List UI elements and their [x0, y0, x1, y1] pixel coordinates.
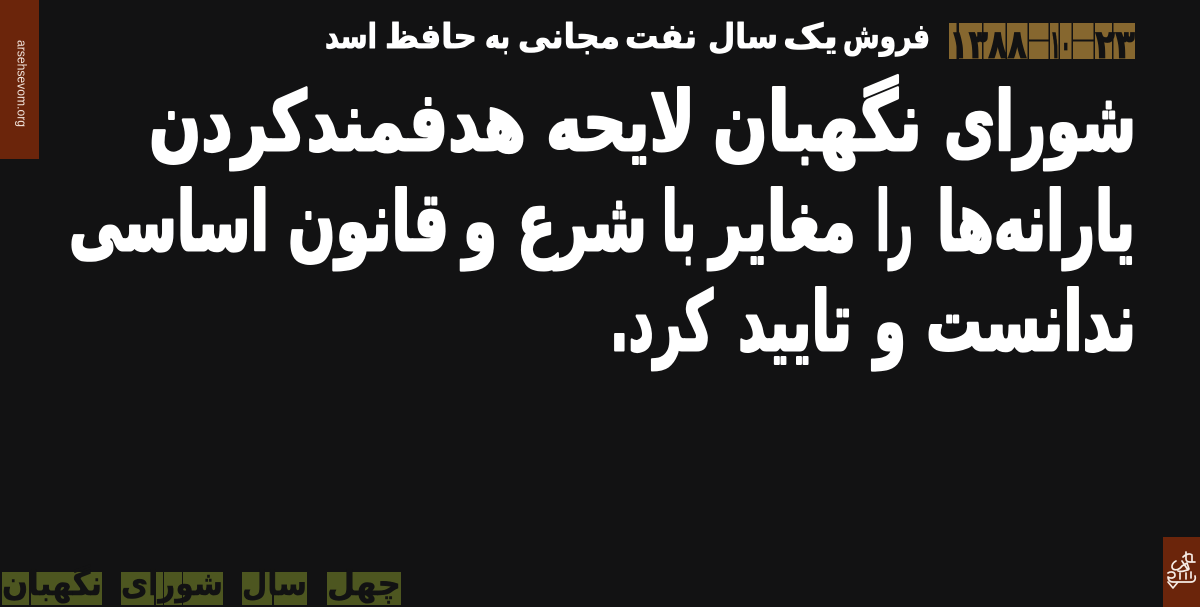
- headline line 2: شرع: [517, 175, 647, 270]
- footer stamp: چهل: [327, 564, 401, 604]
- date stamp: ۱۰: [1050, 22, 1071, 68]
- icon: calligraphic logo: [1168, 552, 1195, 588]
- date stamp: [949, 22, 1135, 68]
- headline: [69, 75, 1136, 371]
- subtitle: اسد: [325, 17, 377, 57]
- panel: logo tab: [1163, 537, 1200, 607]
- date stamp: ۱۳۸۸: [949, 22, 1027, 68]
- subtitle: سال: [708, 17, 778, 57]
- headline line 2: [69, 175, 1135, 271]
- subtitle: [325, 17, 930, 57]
- headline line 1: [149, 75, 1136, 170]
- panel: site tab: [0, 0, 39, 159]
- headline line 2: اساسی: [69, 175, 269, 270]
- panel: site tab: arsehsevom.org: [14, 40, 30, 127]
- footer stamp: [2, 564, 401, 605]
- date stamp: ۲۳: [1095, 22, 1135, 68]
- footer stamp: شورای: [121, 564, 223, 604]
- subtitle: مجانی: [518, 17, 620, 57]
- headline line 3: [610, 275, 1136, 371]
- headline line 2: قانون: [288, 175, 449, 270]
- subtitle: حافظ: [385, 17, 477, 57]
- headline line 3: کرد.: [610, 275, 713, 370]
- headline line 1: لایحه: [546, 75, 695, 170]
- headline line 2: مغایر: [707, 175, 856, 270]
- footer stamp: سال: [242, 564, 307, 604]
- headline line 2: و: [460, 175, 497, 271]
- headline line 3: تایید: [738, 275, 852, 370]
- footer stamp: نگهبان: [2, 564, 102, 604]
- headline line 1: هدفمندکردن: [149, 75, 526, 170]
- subtitle: به: [485, 17, 510, 57]
- subtitle: نفت: [625, 17, 697, 57]
- headline line 2: را: [876, 175, 913, 270]
- headline line 1: نگهبان: [713, 75, 922, 170]
- subtitle: فروش: [843, 17, 930, 57]
- headline line 2: با: [662, 175, 696, 270]
- headline line 3: و: [871, 275, 906, 371]
- subtitle: یک: [783, 17, 838, 57]
